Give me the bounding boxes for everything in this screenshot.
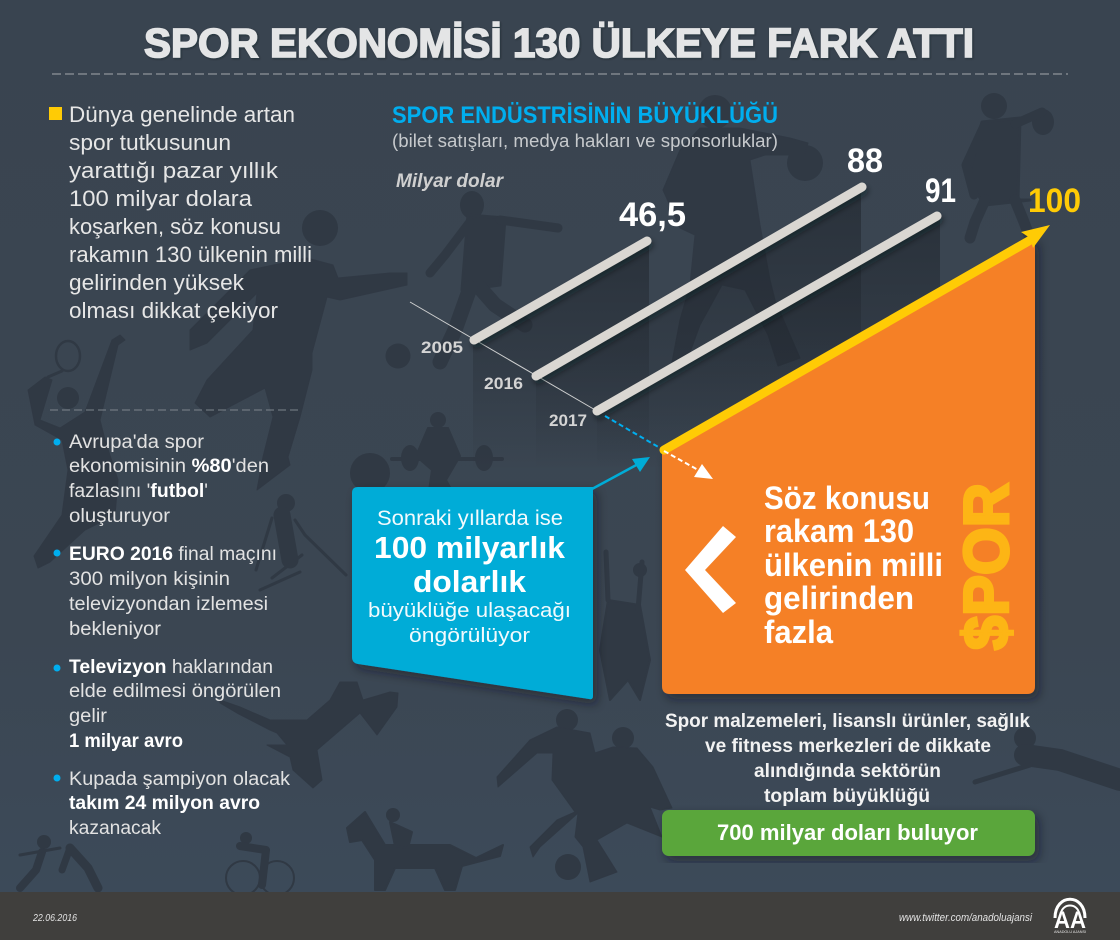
chart heading <box>392 101 778 151</box>
intro text block: koşarken, söz konusu <box>69 214 281 239</box>
bullet: EURO 2016 <box>54 544 277 640</box>
bullet: futbol: Avrupa'da spor <box>69 432 205 453</box>
bullet: Televizyon: 1 milyar avro <box>69 731 183 752</box>
icon: less-than chevron <box>685 526 736 613</box>
value label 100: 100 <box>1028 182 1081 220</box>
value labels: 46,5 <box>619 196 686 234</box>
unit label: Milyar dolar <box>396 171 505 192</box>
panel: blue callout: Sonraki yıllarda ise <box>377 507 563 530</box>
bullet: futbol: ekonomisinin %80'den <box>69 456 269 477</box>
bullet: EURO 2016: 300 milyon kişinin <box>69 569 230 590</box>
bullet: futbol: oluşturuyor <box>69 506 171 527</box>
title: SPOR EKONOMİSİ 130 ÜLKEYE FARK ATTI <box>144 20 974 66</box>
orange panel text: Söz konusu <box>764 480 930 516</box>
bar 2017 <box>597 216 937 411</box>
kicking footballer <box>430 191 558 362</box>
panel: blue callout: dolarlık <box>413 564 527 599</box>
footer <box>0 892 1120 940</box>
chart heading: SPOR ENDÜSTRİSİNİN BÜYÜKLÜĞÜ <box>392 101 778 129</box>
bullet: Televizyon: elde edilmesi öngörülen <box>69 681 281 702</box>
intro text block: 100 milyar dolara <box>69 186 253 211</box>
cyclist <box>226 832 294 895</box>
bullet: Kupada: kazanacak <box>69 818 161 839</box>
volleyball diver <box>975 727 1120 782</box>
intro text block: Dünya genelinde artan <box>69 102 295 127</box>
bullet: Televizyon: Televizyon haklarından <box>69 657 273 678</box>
icon: AA logo: ANADOLU AJANSI <box>1054 929 1086 934</box>
bullet: EURO 2016: EURO 2016 final maçını <box>69 544 277 565</box>
bullet: Televizyon: gelir <box>69 706 108 727</box>
jockey on horse <box>347 808 503 890</box>
bar chart: 2017 <box>549 411 587 430</box>
bullet list <box>54 432 291 839</box>
total market text: ve fitness merkezleri de dikkate <box>705 736 991 757</box>
chart heading: (bilet satışları, medya hakları ve sponsorluklar) <box>392 131 778 151</box>
bullet: Kupada <box>54 769 291 839</box>
bar chart: 2016 <box>484 374 523 393</box>
panel: blue callout: büyüklüğe ulaşacağı <box>368 600 571 622</box>
date: 22.06.2016 <box>32 913 77 924</box>
skier <box>256 494 346 590</box>
axis <box>410 302 597 411</box>
rotated spor label: $POR <box>952 483 1022 650</box>
icon: yellow square bullet <box>49 107 62 120</box>
panel: blue callout: öngörülüyor <box>409 625 530 647</box>
icon: AA logo: AA <box>1054 907 1086 934</box>
bullet: Kupada: takım 24 milyon avro <box>69 793 260 814</box>
bullet: EURO 2016: bekleniyor <box>69 619 162 640</box>
large basketball player <box>663 95 823 366</box>
total market text: toplam büyüklüğü <box>764 786 930 807</box>
bullet: Kupada: Kupada şampiyon olacak <box>69 769 291 790</box>
intro text block: spor tutkusunun <box>69 130 231 155</box>
bar chart: 88 <box>847 142 883 180</box>
total market text: Spor malzemeleri, lisanslı ürünler, sağlık <box>665 711 1030 732</box>
intro text block: rakamın 130 ülkenin milli <box>69 242 312 267</box>
bullet: EURO 2016: televizyondan izlemesi <box>69 594 268 615</box>
panel: blue callout <box>352 487 593 699</box>
left footballer with ball <box>190 210 410 490</box>
jumping players <box>600 552 650 700</box>
total market text <box>665 711 1030 807</box>
panel: green total: 700 milyar doları buluyor <box>717 820 978 845</box>
column shadows <box>473 240 649 470</box>
bar chart: 91 <box>925 172 956 210</box>
intro text block: olması dikkat çekiyor <box>69 298 278 323</box>
bullet: futbol: fazlasını 'futbol' <box>69 481 208 502</box>
panel: orange projection area <box>662 182 1081 694</box>
orange panel text: fazla <box>764 614 833 650</box>
two footballers at bottom <box>497 709 672 882</box>
dashed blue projection <box>605 416 660 448</box>
runners <box>20 835 98 888</box>
diving goalkeeper <box>220 682 398 788</box>
orange panel text: gelirinden <box>764 580 914 616</box>
twitter url: www.twitter.com/anadoluajansi <box>899 912 1032 924</box>
orange panel text <box>764 480 943 650</box>
intro text block: yarattığı pazar yıllık <box>69 158 279 183</box>
total market text: alındığında sektörün <box>754 761 941 782</box>
arrow: yellow growth line <box>664 225 1050 450</box>
intro text block <box>49 102 312 323</box>
tennis player <box>28 335 125 568</box>
orange panel text: ülkenin milli <box>764 547 943 583</box>
orange panel text: rakam 130 <box>764 513 914 549</box>
bar chart <box>410 142 956 470</box>
panel: green total <box>662 810 1035 856</box>
panel: blue callout: 100 milyarlık <box>374 530 566 565</box>
arrow: white dashed <box>664 451 713 479</box>
arrow: blue pointer <box>592 457 650 489</box>
bullet: Televizyon <box>54 657 281 752</box>
bullet: futbol <box>54 432 269 527</box>
year labels: 2005 <box>421 338 463 357</box>
top-right basketball player <box>966 93 1054 238</box>
bar 2005 <box>474 241 647 340</box>
bar 2016 <box>536 187 862 376</box>
intro text block: gelirinden yüksek <box>69 270 245 295</box>
weightlifter <box>350 412 502 498</box>
